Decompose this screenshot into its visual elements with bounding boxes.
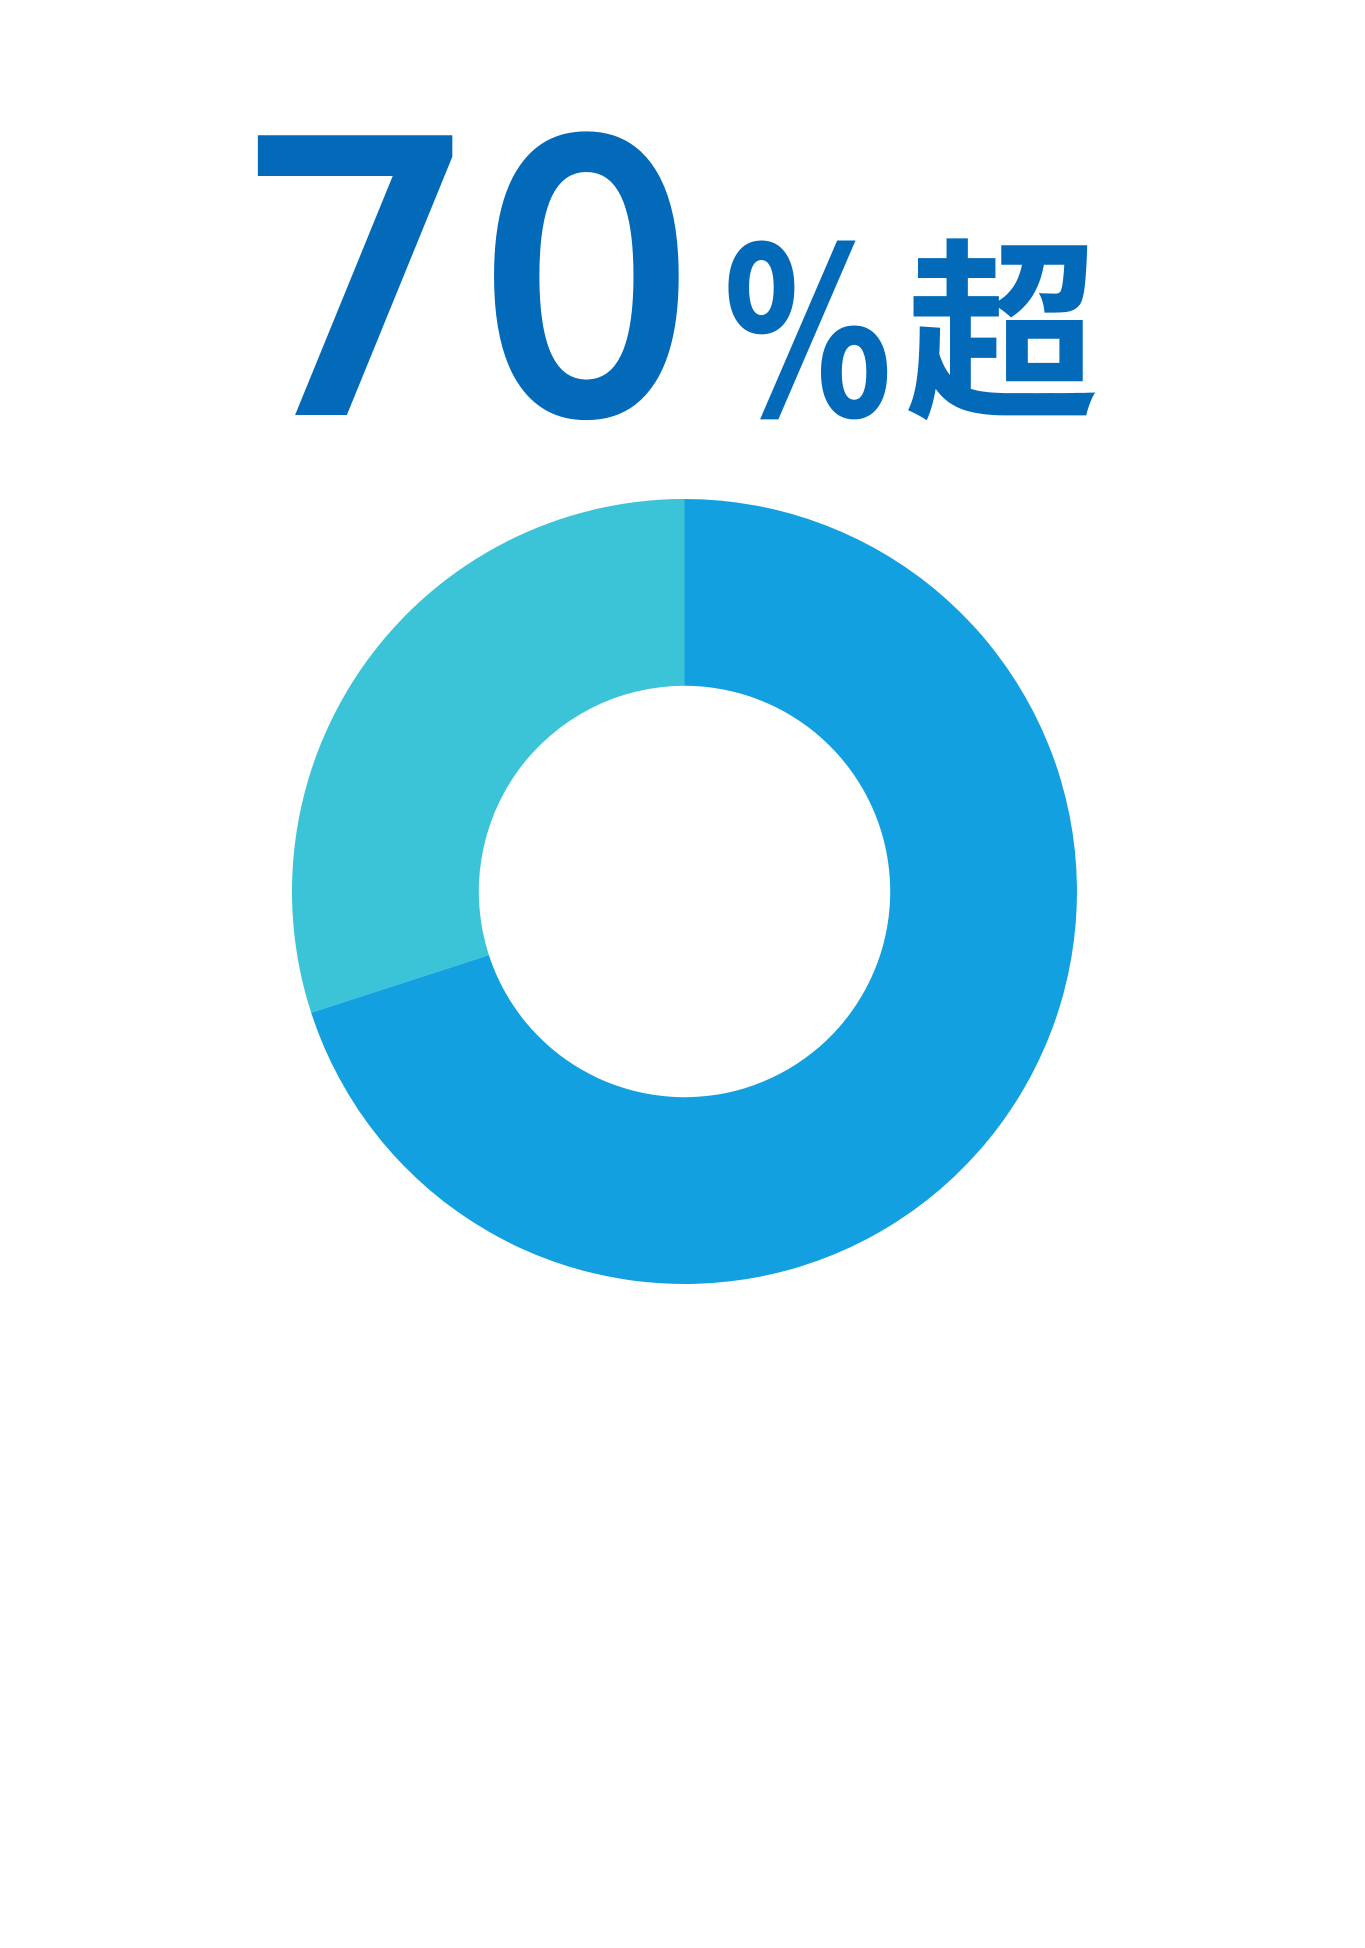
- percent sign: %: [723, 197, 893, 472]
- digit 7: 7: [231, 66, 481, 497]
- segment: remaining 30 percent: [292, 499, 684, 1013]
- kanji: over: 超: [905, 228, 1099, 445]
- segment: 70 percent: [311, 499, 1077, 1284]
- digit 0: 0: [477, 69, 696, 496]
- donut chart: [292, 499, 1077, 1284]
- heading: 70% over: [231, 66, 1099, 497]
